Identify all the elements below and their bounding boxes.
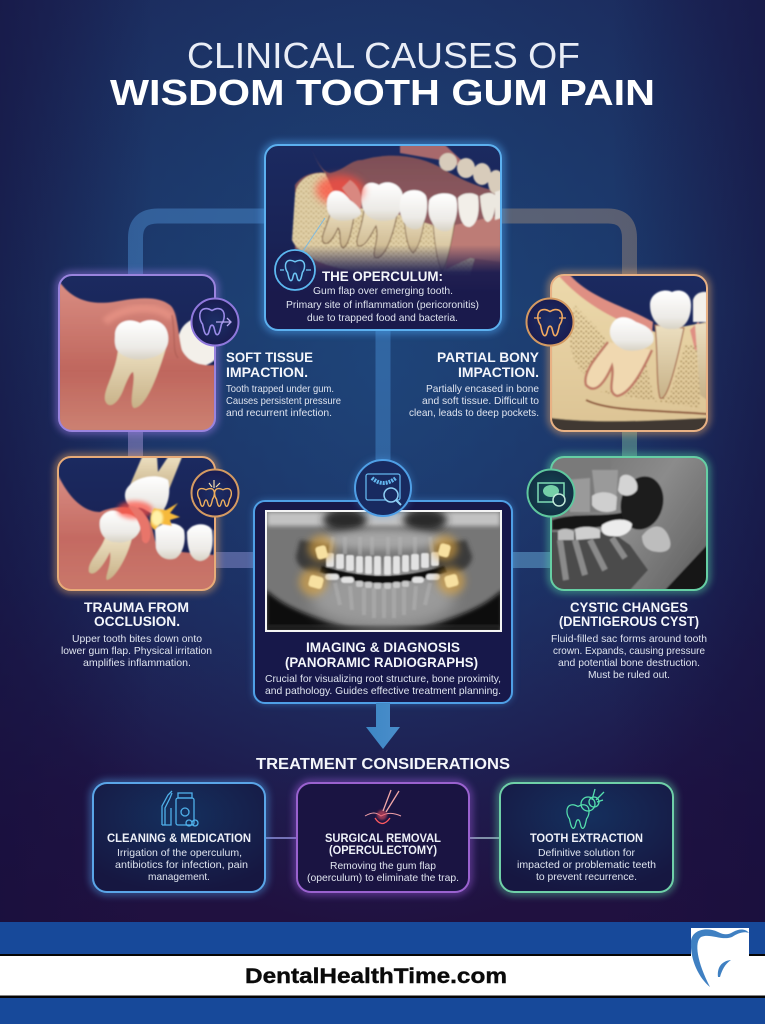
text: partial bony description: clean, leads to deep pockets.	[409, 407, 539, 419]
illustration: erupting wisdom tooth in jaw	[265, 145, 504, 331]
text: extraction description: Definitive solution for	[538, 847, 635, 859]
text: trauma description: amplifies inflammation.	[83, 657, 191, 669]
text: trauma description: Upper tooth bites down onto	[72, 633, 202, 645]
panel: the operculum	[265, 145, 504, 331]
text: imaging description	[265, 673, 501, 697]
text: imaging description: and pathology. Guides effective treatment planning.	[265, 685, 501, 697]
heading: soft tissue impaction	[226, 349, 313, 380]
text: extraction description: impacted or problematic teeth	[517, 859, 656, 871]
text: soft tissue description: and recurrent infection.	[226, 407, 332, 419]
text: extraction description: to prevent recurrence.	[536, 871, 637, 883]
text: trauma description: lower gum flap. Physical irritation	[61, 645, 212, 657]
text: operculum description	[286, 285, 479, 324]
illustration: tooth trapped under gum	[59, 275, 222, 431]
heading: imaging and diagnosis: IMAGING & DIAGNOSIS	[306, 639, 460, 655]
heading: partial bony impaction: PARTIAL BONY	[437, 349, 540, 365]
text: extraction description	[517, 847, 656, 883]
heading: soft tissue impaction: IMPACTION.	[226, 364, 308, 380]
text: soft tissue description: Causes persistent pressure	[226, 395, 341, 407]
heading: surgical removal: (OPERCULECTOMY)	[329, 845, 437, 857]
panoramic radiograph	[265, 508, 502, 632]
heading: trauma from occlusion: OCCLUSION.	[94, 613, 180, 629]
panel: trauma from occlusion	[58, 457, 238, 669]
title: WISDOM TOOTH GUM PAIN	[110, 72, 655, 113]
text: surgical description: Removing the gum flap	[330, 860, 436, 872]
website url: DentalHealthTime.com	[245, 965, 507, 988]
illustration: upper tooth biting gum flap	[58, 457, 216, 590]
panel: imaging and diagnosis	[254, 459, 512, 703]
arrow: down to treatment	[366, 703, 400, 749]
text: operculum description: Gum flap over emerging tooth.	[313, 285, 453, 297]
icon: irrigator and medicine bottle	[162, 791, 198, 826]
icon: scan with circle	[528, 470, 574, 516]
panel: cleaning and medication	[93, 783, 265, 892]
text: cleaning description: Irrigation of the operculum,	[117, 847, 242, 859]
text: trauma description	[61, 633, 212, 669]
title	[110, 35, 655, 113]
heading: cleaning and medication: CLEANING & MEDICATION	[107, 833, 251, 845]
heading: tooth extraction: TOOTH EXTRACTION	[530, 833, 643, 845]
heading: imaging and diagnosis: (PANORAMIC RADIOGRAPHS)	[285, 654, 478, 670]
icon: teeth colliding	[192, 470, 238, 516]
heading: partial bony impaction: IMPACTION.	[458, 364, 539, 380]
footer band	[0, 922, 765, 1024]
illustration: tooth encased in bone	[551, 275, 707, 431]
icon: tooth	[275, 250, 315, 290]
icon: tooth with arrow	[192, 298, 238, 346]
text: cystic description: Must be ruled out.	[588, 669, 670, 681]
text: partial bony description: Partially encased in bone	[426, 383, 539, 395]
text: operculum description: Primary site of inflammation (pericoronitis)	[286, 299, 479, 311]
text: cystic description: Fluid-filled sac forms around tooth	[551, 633, 707, 645]
logo: tooth	[691, 928, 749, 987]
heading: cystic changes: (DENTIGEROUS CYST)	[559, 613, 699, 629]
heading: soft tissue impaction: SOFT TISSUE	[226, 349, 313, 365]
connectors	[136, 216, 630, 560]
heading: surgical removal: SURGICAL REMOVAL	[325, 833, 441, 845]
panel: soft tissue impaction	[59, 275, 341, 431]
connectors between treatment boxes	[265, 837, 500, 839]
icon: tooth and forceps	[567, 789, 604, 828]
text: soft tissue description: Tooth trapped under gum.	[226, 383, 334, 395]
text: cystic description: crown. Expands, causing pressure	[553, 645, 705, 657]
cyst x-ray	[551, 457, 707, 590]
heading: cystic changes: CYSTIC CHANGES	[570, 599, 688, 615]
text: operculum description: due to trapped food and bacteria.	[307, 312, 458, 324]
text: imaging description: Crucial for visualizing root structure, bone proximity,	[265, 673, 501, 685]
heading: cystic changes	[559, 599, 699, 629]
panel: tooth extraction	[500, 783, 673, 892]
text: cystic description: and potential bone destruction.	[558, 657, 700, 669]
heading: trauma from occlusion	[84, 599, 189, 629]
heading: trauma from occlusion: TRAUMA FROM	[84, 599, 189, 615]
text: surgical description	[307, 860, 459, 884]
text: cleaning description: management.	[148, 871, 210, 883]
text: cystic description	[551, 633, 707, 681]
text: cleaning description: antibiotics for infection, pain	[115, 859, 248, 871]
title: CLINICAL CAUSES OF	[187, 35, 580, 76]
heading: treatment considerations: TREATMENT CONSIDERATIONS	[256, 756, 510, 773]
panel: surgical removal	[297, 783, 469, 892]
heading: surgical removal	[325, 833, 441, 857]
text: soft tissue description	[226, 383, 341, 419]
panel: cystic changes	[528, 457, 707, 681]
heading: partial bony impaction	[437, 349, 540, 380]
heading: the operculum: THE OPERCULUM:	[322, 268, 443, 284]
icon: tooth in bone	[526, 298, 574, 346]
heading: imaging and diagnosis	[285, 639, 478, 670]
text: surgical description: (operculum) to eliminate the trap.	[307, 872, 459, 884]
text: partial bony description	[409, 383, 539, 419]
icon: x-ray with magnifier	[354, 459, 412, 517]
text: cleaning description	[115, 847, 248, 883]
panel: partial bony impaction	[409, 275, 707, 431]
text: partial bony description: and soft tissue. Difficult to	[422, 395, 539, 407]
icon: scalpel on gum	[365, 790, 401, 824]
